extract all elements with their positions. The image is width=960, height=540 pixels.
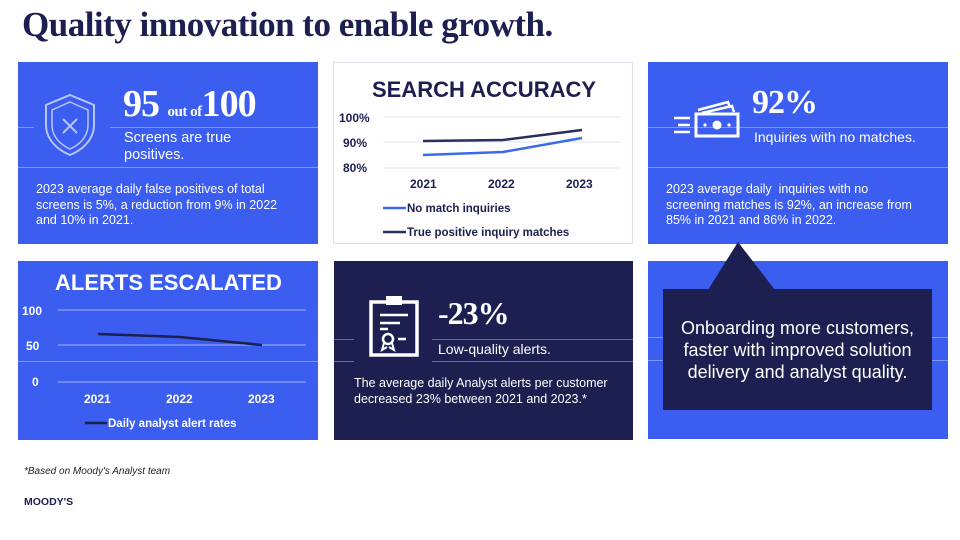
footnote: *Based on Moody's Analyst team: [24, 466, 170, 477]
heading: search accuracy: SEARCH ACCURACY: [372, 77, 596, 102]
line chart: 50: [26, 339, 40, 353]
line chart: 80%: [343, 161, 367, 175]
icon: money: [674, 100, 740, 138]
line chart: 2021: [84, 392, 111, 406]
panel: inquiries no matches: [648, 62, 948, 244]
panel: alerts escalated chart: [18, 261, 318, 440]
line chart: 2023: [566, 177, 593, 191]
panel: search accuracy chart: [333, 62, 633, 244]
text: inquiries with no matches: Inquiries with no matches.: [754, 129, 916, 145]
stat: 92%: 92%: [752, 84, 817, 121]
line chart: Daily analyst alert rates: [108, 418, 236, 430]
legend: [383, 203, 569, 239]
legend: No match inquiries: [407, 203, 511, 215]
line chart: 2021: [410, 177, 437, 191]
line chart: 2022: [166, 392, 193, 406]
logo: Moody's: MOODY'S: [24, 496, 73, 508]
line chart: 100%: [339, 111, 370, 125]
heading: alerts escalated: ALERTS ESCALATED: [55, 270, 282, 295]
line chart: 100: [22, 304, 42, 318]
icon: clipboard certificate: [369, 296, 419, 357]
callout: onboarding message: [663, 242, 932, 410]
line chart: [22, 304, 306, 430]
text: low-quality alerts: Low-quality alerts.: [438, 341, 551, 357]
legend: True positive inquiry matches: [407, 227, 569, 239]
title: Quality innovation to enable growth.: [22, 5, 553, 44]
line chart: 0: [32, 375, 39, 389]
callout: onboarding message: Onboarding more customers, faster with improved solution delivery and analyst quality.: [681, 318, 914, 382]
stat: -23%: -23%: [438, 295, 509, 331]
panel: low-quality alerts: [334, 261, 633, 440]
legend: [85, 422, 107, 424]
line chart: 90%: [343, 136, 367, 150]
panel: onboarding: [648, 261, 948, 439]
text: inquiries description: 2023 average daily inquiries with no screening matches is 92%, an increase from 85% in 2021 and 86% in 2022.: [666, 182, 912, 227]
line chart: [339, 111, 621, 239]
icon: shield: [45, 94, 95, 156]
line chart: 2023: [248, 392, 275, 406]
text: screens are true positives: Screens are true positives.: [124, 130, 231, 163]
panel: true positives: [18, 62, 318, 244]
stat: 95 out of 100: 95 out of100: [123, 83, 256, 125]
text: false positives description: 2023 average daily false positives of total screens is 5%, a reduction from 9% in 2022 and 10% in 2021.: [36, 182, 277, 227]
text: alerts description: The average daily Analyst alerts per customer decreased 23% between 2021 and 2023.*: [354, 376, 608, 406]
line chart: 2022: [488, 177, 515, 191]
